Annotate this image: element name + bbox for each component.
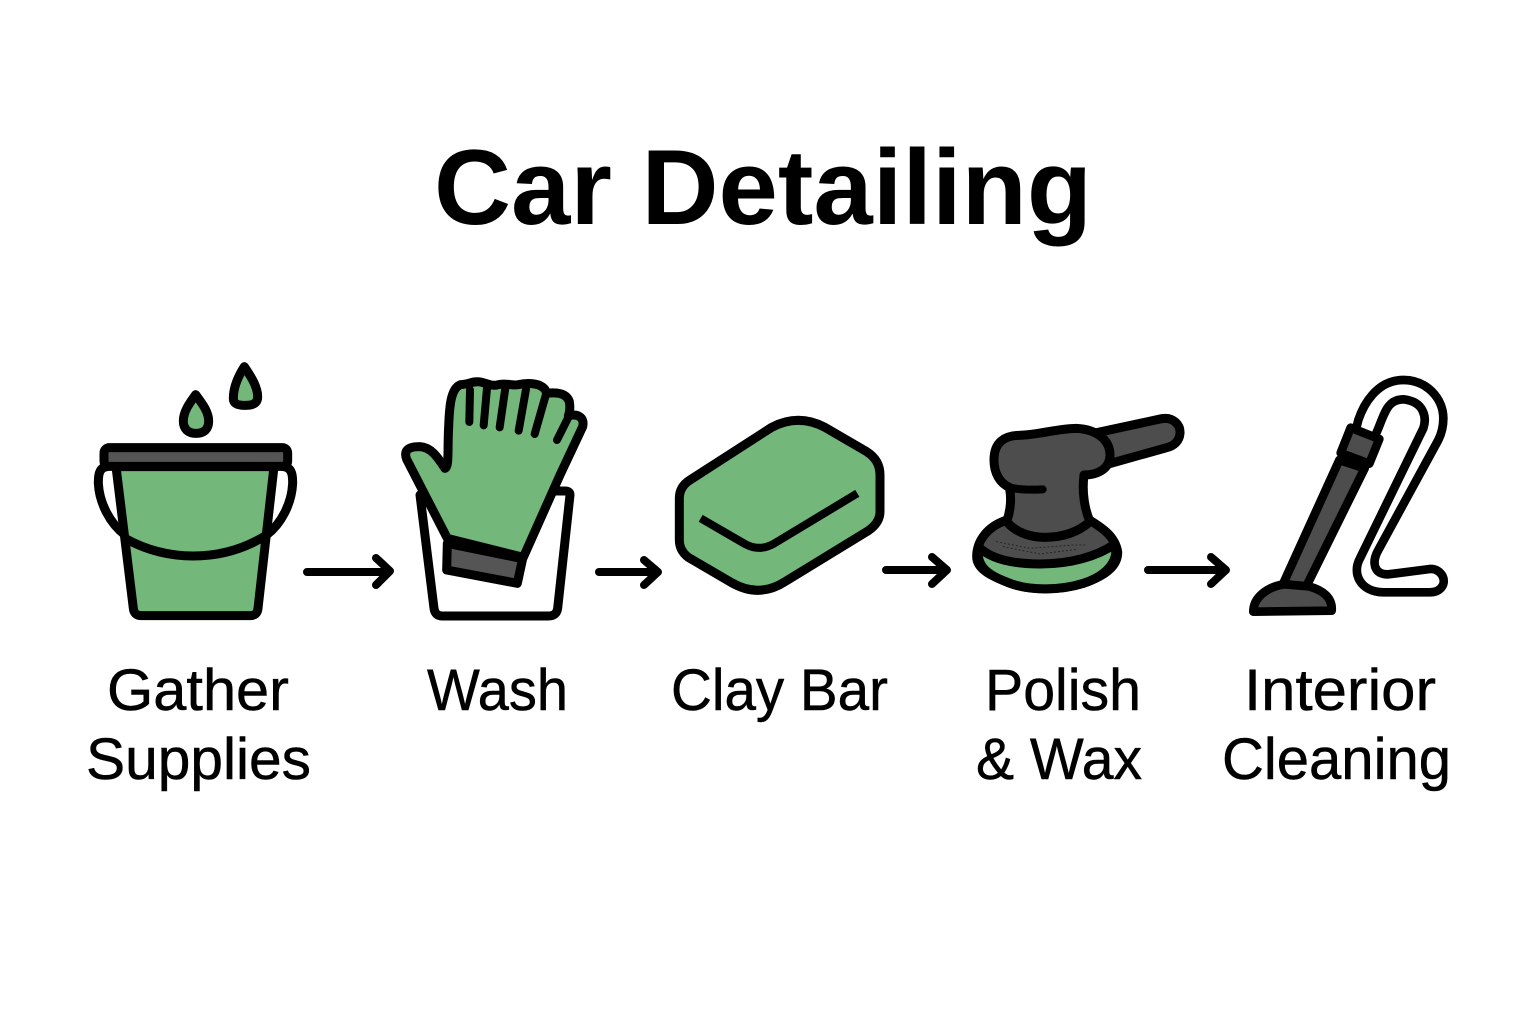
arrow: step 1 to 2	[307, 558, 390, 585]
arrow: step 4 to 5	[1148, 557, 1226, 584]
mitt finger slits	[469, 388, 571, 440]
vacuum tube	[1283, 460, 1365, 588]
wash bucket	[420, 491, 570, 616]
arrow: step 3 to 4	[886, 557, 947, 584]
label: Gather Supplies: Supplies	[86, 727, 311, 792]
polisher handle	[1097, 418, 1180, 464]
label: Wash: Wash	[427, 658, 568, 723]
icon: vacuum cleaner	[1253, 380, 1444, 612]
label: Polish & Wax: Polish	[985, 658, 1141, 723]
mitt cuff	[447, 543, 523, 583]
arrow: step 2 to 3	[599, 560, 658, 585]
label: Clay Bar: Clay Bar	[671, 658, 888, 723]
label: Gather Supplies	[86, 658, 311, 792]
polisher body	[994, 428, 1110, 537]
icon: orbital polisher	[977, 418, 1180, 589]
label: Polish & Wax: & Wax	[976, 727, 1142, 792]
polisher green pad	[978, 544, 1116, 589]
title: Car Detailing	[434, 127, 1092, 247]
label: Interior Cleaning: Interior	[1244, 658, 1436, 723]
vacuum floor nozzle	[1253, 584, 1332, 612]
vacuum collar	[1341, 428, 1379, 464]
polisher pad dots	[997, 542, 1087, 554]
clay bar body	[679, 420, 880, 590]
vacuum hose	[1355, 380, 1444, 592]
bucket rim	[104, 448, 288, 466]
bucket body	[116, 467, 274, 616]
label: Polish & Wax	[976, 658, 1142, 792]
icon: bucket with water drops	[98, 367, 293, 616]
bucket handle front	[125, 535, 267, 556]
label: Interior Cleaning: Cleaning	[1222, 727, 1451, 792]
bucket handle sides	[98, 467, 293, 535]
polisher crease	[1008, 487, 1043, 490]
polisher pad base	[977, 519, 1118, 589]
icon: clay bar	[679, 420, 880, 590]
label: Interior Cleaning	[1222, 658, 1451, 792]
icon: left water drop	[183, 395, 209, 433]
icon: right water drop	[233, 367, 258, 405]
clay bar crease	[701, 493, 857, 548]
mitt hand	[406, 382, 583, 557]
icon: wash mitt in bucket	[406, 382, 583, 616]
label: Gather Supplies: Gather	[107, 658, 289, 723]
